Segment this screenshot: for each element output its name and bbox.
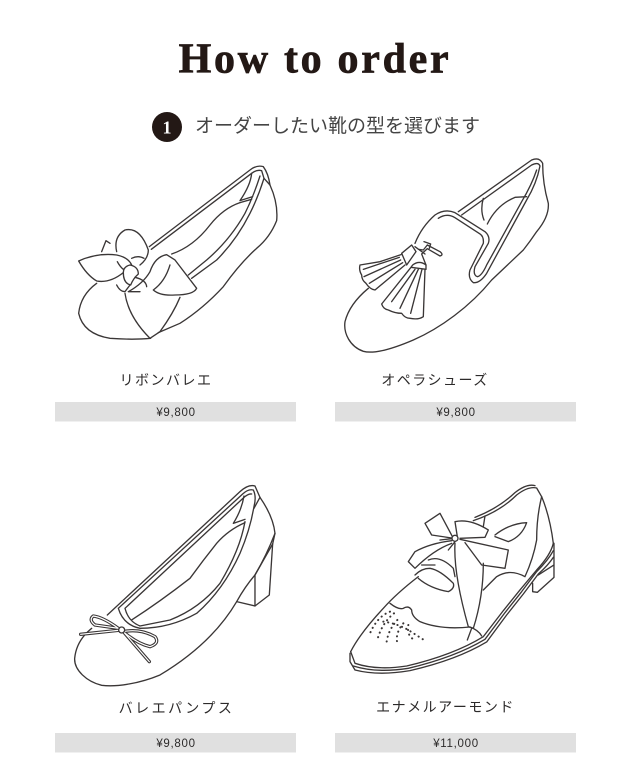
illustration: ballet pumps xyxy=(75,486,275,686)
icon: step number 1: 1 xyxy=(162,118,172,138)
illustration: enamel almond lace-up xyxy=(350,485,554,673)
price bar: ¥9,800 xyxy=(155,738,196,750)
label: ribbon ballet: リボンバレエ xyxy=(120,372,212,388)
label: ballet pumps: バレエパンプス xyxy=(119,700,234,716)
label: enamel almond: エナメルアーモンド xyxy=(376,699,515,715)
illustration: ribbon ballet shoe xyxy=(79,166,277,339)
price bar: ¥11,000 xyxy=(432,738,479,750)
illustration: tassel opera shoe xyxy=(345,159,548,352)
product: enamel almond xyxy=(335,485,576,752)
price bar xyxy=(55,733,296,752)
price bar: ¥9,800 xyxy=(155,407,196,419)
title: How to order xyxy=(179,36,451,82)
product: ribbon ballet xyxy=(55,166,296,422)
product: opera shoes xyxy=(335,159,576,422)
price bar xyxy=(335,402,576,422)
icon: step number 1 xyxy=(152,112,182,142)
step heading xyxy=(152,112,480,142)
price bar: ¥9,800 xyxy=(435,407,476,419)
price bar xyxy=(335,733,576,752)
label: opera shoes: オペラシューズ xyxy=(381,372,489,388)
product: ballet pumps xyxy=(55,486,296,752)
bow ribbon xyxy=(81,616,157,662)
step instruction text: オーダーしたい靴の型を選びます xyxy=(195,115,480,137)
price bar xyxy=(55,402,296,422)
